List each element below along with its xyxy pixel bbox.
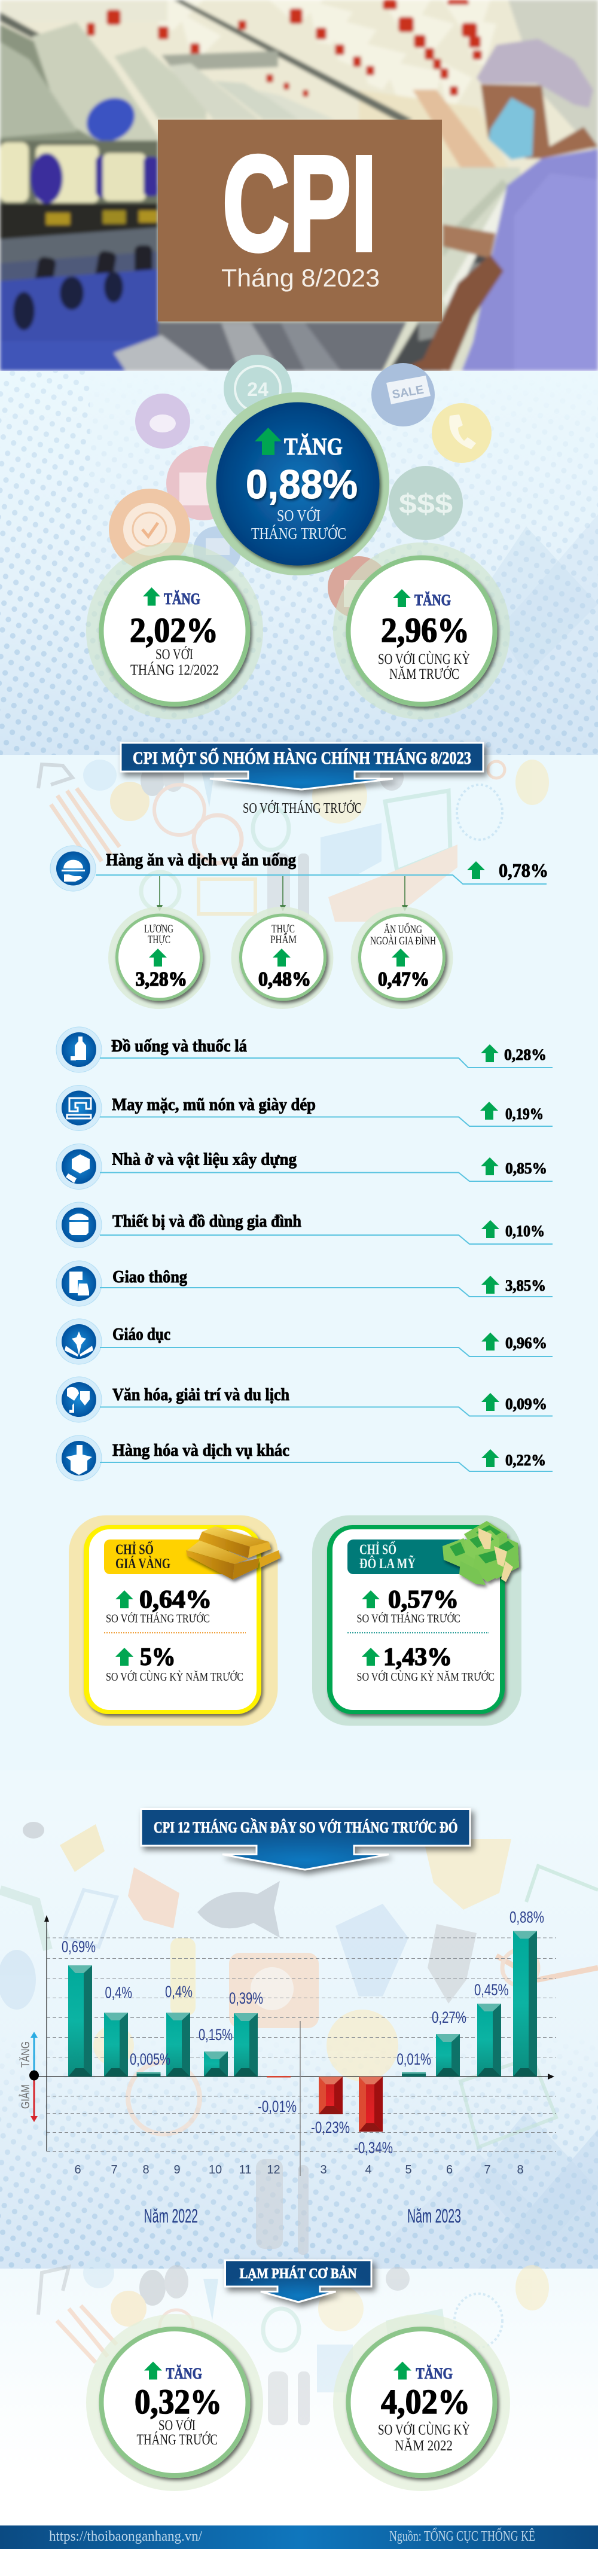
caption (270, 923, 297, 946)
month labels: 9 (173, 2163, 181, 2176)
caption (378, 2421, 470, 2454)
value labels: 0,39% (229, 1989, 263, 2007)
value: 0,10% (505, 1223, 545, 1240)
label: Giao thông (112, 1267, 187, 1287)
value labels: -0,34% (354, 2139, 393, 2157)
caption: SO VỚI THÁNG TRƯỚC (106, 1611, 210, 1626)
caption (136, 2417, 218, 2448)
month labels: 8 (517, 2163, 524, 2176)
value labels: -0,23% (311, 2118, 350, 2136)
value: 0,88% (246, 462, 358, 507)
value labels: 0,15% (199, 2026, 233, 2044)
caption (144, 923, 173, 946)
icon: food cloche (50, 846, 96, 891)
hero photo: textile factory worker (0, 0, 598, 371)
caption: THỰC (148, 934, 170, 946)
value labels: 0,27% (432, 2008, 466, 2026)
label tag (347, 1539, 473, 1574)
year label: 2022: Năm 2022 (144, 2205, 198, 2227)
leader line (100, 1117, 553, 1126)
footer: source: Nguồn: TỔNG CỤC THỐNG KÊ (389, 2528, 535, 2544)
icon: up arrow (481, 1220, 499, 1238)
value: 0,85% (505, 1160, 547, 1177)
value: 0,78% (499, 859, 548, 881)
value: so với tháng trước: 0,64% (139, 1586, 212, 1614)
icon: up arrow (393, 2361, 411, 2379)
value labels: -0,01% (258, 2098, 297, 2115)
date subtitle: Tháng 8/2023 (221, 264, 380, 292)
panel: monthly chart background (0, 1821, 598, 2269)
tag text (115, 1542, 170, 1572)
leader line (96, 875, 547, 884)
value labels (62, 1908, 544, 2157)
icon: up arrow (115, 1648, 133, 1666)
caption (370, 923, 436, 947)
icon: up arrow (392, 949, 410, 967)
banner: CPI 12 tháng (141, 1809, 470, 1870)
icon: gold bars (186, 1526, 280, 1580)
month labels: 6 (446, 2163, 453, 2176)
value: 2,96% (381, 611, 469, 650)
icon: sewing machine (56, 1085, 102, 1130)
month labels: 10 (209, 2163, 222, 2176)
month labels: 3 (320, 2163, 327, 2176)
bar chart: monthly CPI (19, 1908, 556, 2227)
label: Văn hóa, giải trí và du lịch (112, 1385, 289, 1404)
legend: tăng giảm: GIẢM (19, 2084, 32, 2109)
label: TĂNG (164, 590, 200, 608)
caption: SO VỚI CÙNG KỲ (378, 2421, 470, 2438)
circle: lạm phát 0,32% (86, 2314, 263, 2491)
bar: tháng 11/2022 (234, 2013, 258, 2077)
month labels: 5 (405, 2163, 412, 2176)
value labels: 0,4% (165, 1983, 193, 2001)
icon: up arrow (143, 587, 160, 606)
title text: CPI (222, 127, 377, 279)
leader line (100, 1462, 553, 1471)
icon: up arrow (467, 861, 485, 879)
caption: ĂN UỐNG (384, 923, 422, 936)
tag text: CHỈ SỐ (359, 1542, 396, 1557)
label: May mặc, mũ nón và giày dép (112, 1095, 316, 1114)
bar: tháng 4/2023 (359, 2077, 383, 2132)
bar: tháng 7/2022 (104, 2013, 128, 2077)
banner: lạm phát cơ bản (225, 2260, 371, 2302)
month labels: 8 (142, 2163, 150, 2176)
label: Nhà ở và vật liệu xây dựng (112, 1150, 297, 1169)
value: 2,02% (130, 611, 218, 650)
icon: bus and car (56, 1261, 102, 1306)
sub-circle: lương thực (108, 907, 210, 1009)
year label: 2023: Năm 2023 (407, 2205, 461, 2227)
heading: CPI 12 THÁNG GẦN ĐÂY SO VỚI THÁNG TRƯỚC ĐÓ (154, 1819, 458, 1836)
row: Hàng hóa và dịch vụ khác (56, 1435, 553, 1481)
tag text: ĐÔ LA MỸ (359, 1556, 416, 1572)
axes (36, 1915, 554, 2151)
icon: up arrow (149, 949, 167, 967)
row: Giao thông (56, 1261, 553, 1306)
panel: headline figures background (0, 371, 598, 757)
value: so với cùng kỳ: 5% (140, 1644, 176, 1671)
value labels: 0,45% (474, 1981, 508, 1999)
leader line (100, 1407, 553, 1416)
tag text: CHỈ SỐ (115, 1542, 154, 1557)
month labels: 12 (267, 2163, 280, 2176)
month labels: 7 (111, 2163, 118, 2176)
caption: SO VỚI (155, 646, 193, 663)
value: 0,48% (258, 968, 311, 990)
icon: culture (56, 1377, 102, 1422)
caption: SO VỚI CÙNG KỲ (378, 651, 470, 667)
caption: NGOÀI GIA ĐÌNH (370, 934, 436, 947)
month labels: 4 (365, 2163, 372, 2176)
caption: SO VỚI THÁNG TRƯỚC (356, 1611, 460, 1626)
month labels: 11 (239, 2163, 251, 2176)
caption: NĂM TRƯỚC (389, 666, 459, 682)
main banner: CPI một số nhóm hàng (121, 743, 483, 789)
icon: up arrow (362, 1648, 380, 1666)
row: Hàng ăn và dịch vụ ăn uống (50, 846, 548, 891)
month labels: 6 (74, 2163, 81, 2176)
icon: up arrow (144, 2361, 162, 2379)
panel: core inflation background (0, 2257, 598, 2526)
card: chỉ số giá vàng (69, 1516, 280, 1726)
leader line (100, 1235, 553, 1244)
legend: tăng giảm (19, 2032, 39, 2122)
icon: bottle (56, 1027, 102, 1072)
caption: THÁNG TRƯỚC (251, 525, 346, 542)
leader line (100, 1348, 553, 1356)
caption (251, 507, 346, 542)
row: Thiết bị và đồ dùng gia đình (56, 1202, 553, 1248)
bar: tháng 7/2023 (477, 2004, 501, 2077)
icon: box (56, 1435, 102, 1481)
row: Văn hóa, giải trí và du lịch (56, 1377, 553, 1422)
value labels: 0,69% (62, 1938, 96, 1956)
value: so với tháng trước: 0,57% (388, 1586, 459, 1614)
footer bar (0, 2525, 598, 2549)
icon: up arrow (255, 428, 282, 455)
icon: up arrow (393, 589, 411, 607)
sub-circle: thực phẩm (231, 907, 334, 1009)
circle: 2,02% so với tháng 12/2022 (86, 542, 263, 720)
heading: CPI MỘT SỐ NHÓM HÀNG CHÍNH THÁNG 8/2023 (133, 748, 471, 768)
row: May mặc, mũ nón và giày dép (56, 1085, 553, 1130)
icon: up arrow (481, 1276, 499, 1294)
circle: lạm phát 4,02% (333, 2314, 510, 2491)
arrows to sub-groups (157, 876, 407, 910)
bar: tháng 3/2023 (319, 2077, 343, 2114)
bar: tháng 8/2023 (513, 1931, 537, 2077)
bar: tháng 10/2022 (204, 2051, 228, 2077)
row: Đồ uống và thuốc lá (56, 1027, 553, 1072)
tag text (359, 1542, 416, 1572)
panel: commodity groups background (0, 755, 598, 1821)
caption (378, 651, 470, 682)
icon: stacks of dollars (443, 1521, 519, 1585)
caption: LƯƠNG (144, 923, 173, 935)
background icons: shopping pastel badges: SALE (391, 383, 425, 401)
leader line (100, 1172, 553, 1181)
caption: SO VỚI (158, 2417, 196, 2434)
tag text: GIÁ VÀNG (115, 1556, 170, 1572)
label: Đồ uống và thuốc lá (111, 1037, 247, 1056)
sub-circle: ăn uống ngoài gia đình (350, 907, 453, 1009)
label: Hàng hóa và dịch vụ khác (112, 1441, 289, 1460)
bar: tháng 5/2023 (402, 2072, 426, 2077)
bar: tháng 6/2023 (436, 2034, 460, 2077)
label: Giáo dục (112, 1325, 170, 1344)
label: TĂNG (416, 2365, 453, 2382)
title block: CPI (158, 120, 442, 322)
value: so với cùng kỳ: 1,43% (383, 1644, 452, 1671)
leader line (100, 1288, 553, 1297)
value labels: 0,88% (509, 1908, 544, 1926)
value: 3,85% (505, 1277, 546, 1294)
value: 0,96% (505, 1334, 547, 1352)
footer: website: https://thoibaonganhang.vn/ (49, 2529, 202, 2544)
caption: THỰC (271, 923, 295, 935)
icon: rice cooker (56, 1202, 102, 1248)
label: Thiết bị và đồ dùng gia đình (112, 1212, 301, 1231)
bar: tháng 12/2022 (267, 2076, 291, 2078)
leader line (100, 1058, 553, 1068)
caption: NĂM 2022 (395, 2437, 453, 2454)
row: Giáo dục (56, 1319, 553, 1364)
icon: up arrow (481, 1449, 499, 1467)
icon: up arrow (481, 1333, 499, 1351)
caption: SO VỚI CÙNG KỲ NĂM TRƯỚC (106, 1669, 243, 1684)
heading: LẠM PHÁT CƠ BẢN (239, 2266, 357, 2282)
caption: THÁNG 12/2022 (130, 661, 219, 678)
icon: building materials (56, 1144, 102, 1189)
label tag (104, 1539, 229, 1574)
headline circle: 0,88% (206, 392, 389, 575)
background icons: shopping pastel badges: $$$ (399, 488, 453, 519)
background icons: shopping pastel badges (109, 355, 492, 618)
subheading: SO VỚI THÁNG TRƯỚC (243, 800, 362, 816)
icon: up arrow (481, 1044, 499, 1062)
label: TĂNG: TĂNG (284, 433, 343, 460)
value: 0,09% (505, 1395, 547, 1413)
caption: PHẨM (270, 933, 297, 946)
label: TĂNG (414, 592, 451, 609)
value: 4,02% (381, 2382, 470, 2421)
value: 3,28% (135, 968, 187, 990)
caption: THÁNG TRƯỚC (136, 2431, 218, 2448)
icon: up arrow (481, 1157, 499, 1175)
icon: up arrow (273, 949, 291, 967)
value labels: 0,005% (130, 2050, 170, 2068)
background icons: shopping pastel badges: 24 (247, 379, 269, 400)
value: 0,19% (505, 1105, 544, 1123)
value: 0,32% (135, 2382, 222, 2421)
circle: 2,96% so với cùng kỳ (333, 542, 510, 720)
icon: up arrow (480, 1102, 498, 1120)
icon: up arrow (362, 1590, 380, 1608)
value labels: 0,4% (105, 1983, 132, 2001)
bar: tháng 9/2022 (166, 2013, 190, 2077)
month labels: 7 (484, 2163, 491, 2176)
value: 0,28% (504, 1046, 547, 1063)
icon: up arrow (481, 1393, 499, 1411)
caption (130, 646, 219, 678)
caption: SO VỚI (277, 507, 321, 525)
icon: open book (56, 1319, 102, 1364)
caption: SO VỚI CÙNG KỲ NĂM TRƯỚC (356, 1669, 495, 1684)
icon: up arrow (115, 1590, 133, 1608)
month labels (74, 2163, 524, 2176)
row: Nhà ở và vật liệu xây dựng (56, 1144, 553, 1189)
card: chỉ số đô la Mỹ (312, 1516, 521, 1726)
value labels: 0,01% (397, 2050, 431, 2068)
bar: tháng 8/2022 (136, 2072, 160, 2077)
value: 0,22% (505, 1452, 546, 1469)
value: 0,47% (378, 968, 429, 990)
bar: tháng 6/2022 (68, 1965, 92, 2077)
label: Hàng ăn và dịch vụ ăn uống (106, 850, 296, 870)
label: TĂNG (166, 2365, 202, 2382)
legend: tăng giảm: TĂNG (20, 2041, 32, 2068)
